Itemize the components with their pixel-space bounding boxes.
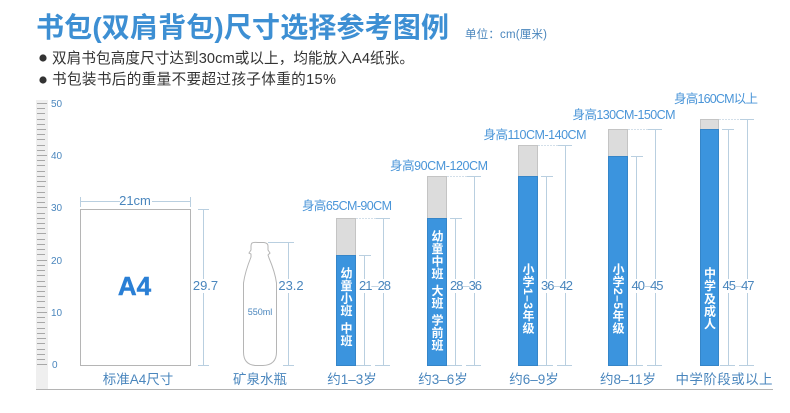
bar: 6-9 years xyxy=(484,127,586,387)
A4 sheet xyxy=(80,193,218,387)
bar: 1-3 years: 约1–3岁 xyxy=(327,372,377,387)
bar: 3-6 years: 身高90CM-120CM xyxy=(390,158,488,173)
water bottle xyxy=(233,242,304,387)
bar: 6-9 years: 36–42 xyxy=(541,278,573,293)
bar: 1-3 years: 中班 xyxy=(339,321,353,347)
bullet points xyxy=(39,50,414,88)
water bottle: 550ml xyxy=(248,307,272,317)
ruler: 10 xyxy=(51,308,63,319)
bar: secondary school and adult xyxy=(674,91,772,387)
bar: 3-6 years: 幼童中班 xyxy=(430,229,444,280)
bar: secondary school and adult: 身高160CM以上 xyxy=(674,91,758,106)
A4 sheet: 29.7 xyxy=(193,278,218,293)
bar: secondary school and adult: 中学及成人 xyxy=(702,266,716,330)
bar: 1-3 years: 身高65CM-90CM xyxy=(302,198,392,213)
ruler: 0 xyxy=(52,360,58,371)
bar: 8-11 years: 40–45 xyxy=(632,278,664,293)
water bottle: 23.2 xyxy=(278,278,304,293)
bar: 1-3 years: 21–28 xyxy=(359,278,391,293)
bar: 1-3 years: 幼童小班 xyxy=(339,266,353,317)
A4 sheet: 21cm xyxy=(119,193,151,208)
bar: secondary school and adult: 45–47 xyxy=(722,278,754,293)
bar: 8-11 years xyxy=(572,107,676,387)
bar: 3-6 years: 约3–6岁 xyxy=(418,372,468,387)
ruler: 50 xyxy=(51,99,63,110)
bar: 3-6 years xyxy=(390,158,488,387)
water bottle: 矿泉水瓶 xyxy=(233,371,287,387)
bar: 3-6 years: 大班 xyxy=(430,283,444,310)
baseline xyxy=(36,388,773,390)
bullet points: 书包装书后的重量不要超过孩子体重的15% xyxy=(52,71,336,88)
bar: 6-9 years: 身高110CM-140CM xyxy=(484,127,586,142)
ruler: 40 xyxy=(51,151,63,162)
bar: 3-6 years: 学前班 xyxy=(430,313,444,352)
ruler: 30 xyxy=(51,203,63,214)
ruler: 20 xyxy=(51,256,63,267)
bar: 6-9 years: 约6–9岁 xyxy=(509,372,559,387)
bar: 3-6 years: 28–36 xyxy=(450,278,482,293)
title: 书包(双肩背包)尺寸选择参考图例 xyxy=(36,12,449,43)
unit note: 单位：cm(厘米) xyxy=(465,27,547,41)
bar: secondary school and adult: 中学阶段或以上 xyxy=(676,372,772,387)
bar: 6-9 years: 小学1–3年级 xyxy=(521,263,535,335)
ruler xyxy=(36,99,63,389)
bullet points: 双肩书包高度尺寸达到30cm或以上，均能放入A4纸张。 xyxy=(52,50,414,67)
A4 sheet: 标准A4尺寸 xyxy=(103,372,173,387)
A4 sheet: A4 xyxy=(118,271,152,301)
bar: 8-11 years: 约8–11岁 xyxy=(600,372,656,387)
bar: 8-11 years: 身高130CM-150CM xyxy=(572,107,676,122)
bar: 1-3 years xyxy=(302,198,392,387)
bar: 8-11 years: 小学2–5年级 xyxy=(611,263,625,335)
